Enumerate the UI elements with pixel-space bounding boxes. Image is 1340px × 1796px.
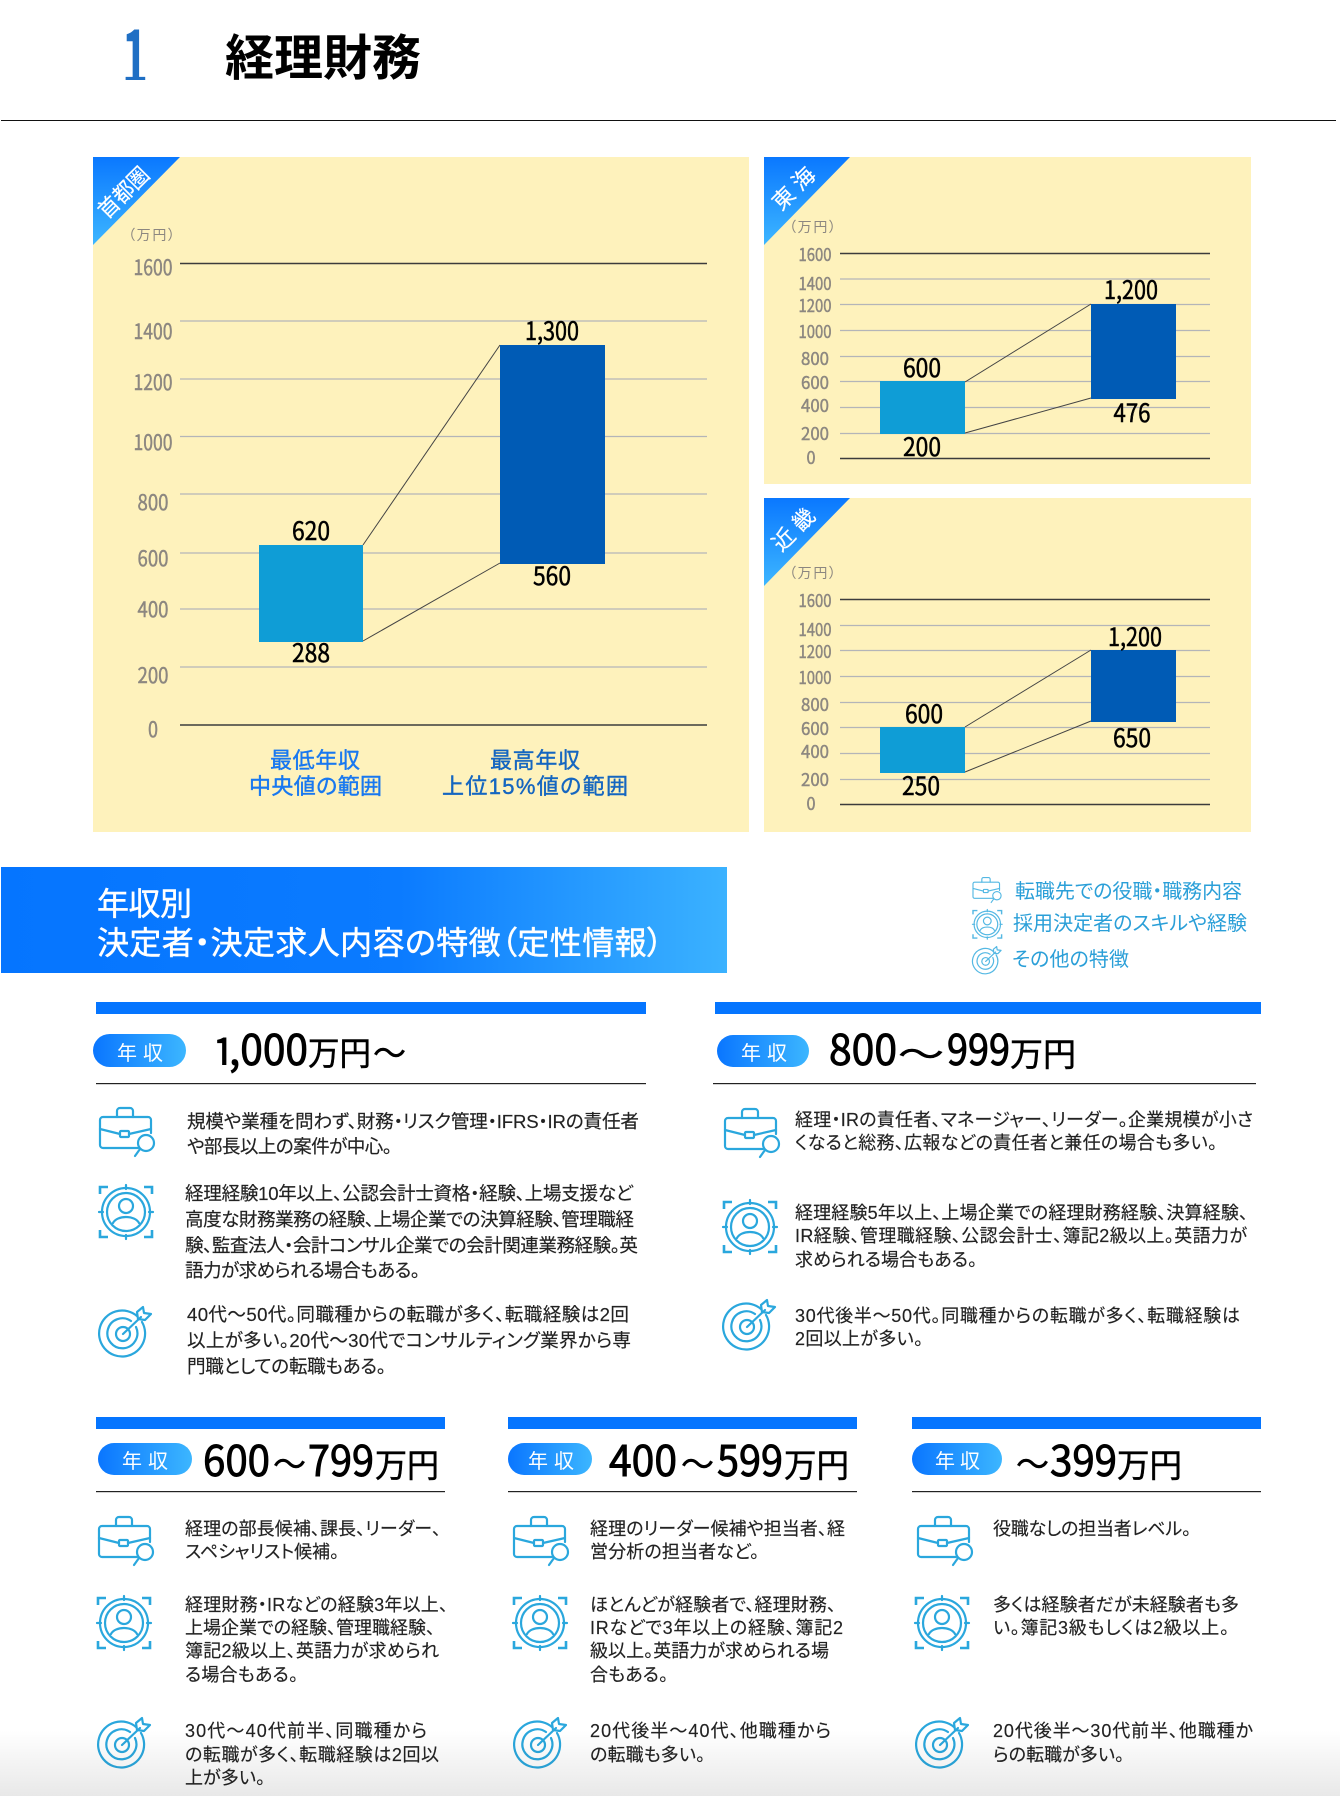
text: skills: 求められる場合もある。: [795, 1250, 977, 1270]
bar: lowest salary range: [880, 727, 965, 773]
salary heading: 599: [717, 1428, 783, 1489]
salary heading: ～: [898, 1036, 944, 1073]
bar values: 1,300: [525, 312, 579, 348]
unit label: （万円）: [789, 219, 836, 235]
text: position: 営分析の担当者など。: [590, 1542, 759, 1562]
bar values: [292, 312, 579, 670]
legend: 転職先での役職・職務内容: [1015, 880, 1242, 903]
y axis labels: 1600: [798, 587, 832, 613]
icon: target: [98, 1718, 150, 1768]
y axis labels: 200: [801, 766, 829, 792]
text: other: [590, 1721, 831, 1765]
salary heading: ～: [373, 1035, 406, 1072]
y axis labels: 800: [801, 691, 829, 717]
text: skills: 簿記2級以上、英語力が求められ: [185, 1641, 439, 1661]
salary heading: 399: [1050, 1428, 1117, 1489]
category label: 最低年収: 中央値の範囲: [249, 774, 382, 799]
text: skills: 経理経験5年以上、上場企業での経理財務経験、決算経験、: [795, 1203, 1248, 1223]
text: other: の転職が多く、転職経験は2回以: [185, 1745, 439, 1765]
text: skills: 経理財務・IRなどの経験3年以上、: [185, 1595, 448, 1615]
section title: 経理財務: [225, 32, 421, 86]
y axis labels: 1200: [134, 367, 172, 397]
icon: person: [915, 1596, 969, 1650]
salary heading: 400: [609, 1428, 677, 1489]
pill: 年収: [93, 1034, 186, 1067]
text: other: 20代後半～40代、他職種から: [590, 1721, 831, 1741]
salary heading: 万円: [308, 1035, 371, 1072]
salary heading: 1: [213, 1021, 234, 1082]
y axis labels: 1000: [798, 318, 832, 344]
pill: 年収: 年収: [741, 1042, 787, 1065]
icon: person: [513, 1596, 567, 1650]
salary heading: ～: [1016, 1446, 1049, 1483]
banner: 年収別 heading: 決定者・決定求人内容の特徴（定性情報）: [97, 925, 663, 961]
y axis labels: 1400: [798, 616, 832, 642]
icon: person: [97, 1596, 151, 1650]
text: other: [795, 1306, 1240, 1349]
region tag: 近畿: [764, 498, 850, 586]
salary heading: 999: [947, 1017, 1010, 1078]
bar values: 250: [902, 767, 940, 803]
category label: 最低年収: [249, 748, 382, 799]
y axis labels: [798, 241, 832, 470]
panel: 東海 chart: [764, 157, 1251, 484]
y axis labels: [134, 252, 172, 744]
heading: section number and title: [126, 30, 420, 80]
text: position: 経理のリーダー候補や担当者、経: [590, 1519, 845, 1539]
pill: 年収: [508, 1443, 592, 1475]
pill: 年収: [717, 1035, 809, 1067]
text: position: 役職なしの担当者レベル。: [993, 1519, 1191, 1539]
unit label: （万円）: [789, 565, 836, 581]
legend: その他の特徴: [1012, 948, 1129, 971]
bar values: 620: [292, 512, 330, 548]
icon: target: [99, 1307, 151, 1357]
text: other: 20代後半～30代前半、他職種か: [993, 1721, 1253, 1741]
connector lines: [965, 650, 1091, 772]
text: position: [590, 1519, 845, 1562]
bar: lowest salary range: [259, 545, 363, 642]
y axis labels: 0: [806, 444, 816, 470]
panel: 年収 400～599万円: [508, 1417, 857, 1768]
salary heading: 万円: [1010, 1036, 1076, 1073]
pill: 年収: [912, 1443, 1002, 1475]
text: position: 経理・IRの責任者、マネージャー、リーダー。企業規模が小さ: [795, 1110, 1253, 1130]
y axis labels: 0: [148, 714, 158, 744]
y axis labels: 1000: [134, 427, 172, 457]
text: skills: 合もある。: [590, 1665, 668, 1685]
salary heading: [217, 1033, 405, 1074]
bar: highest salary range: [1091, 304, 1176, 399]
text: position: 経理の部長候補、課長、リーダー、: [185, 1519, 441, 1539]
text: other: 上が多い。: [185, 1768, 265, 1788]
unit label: （万円）: [128, 227, 175, 243]
text: skills: [590, 1595, 843, 1685]
icon: briefcase: [99, 1517, 153, 1565]
banner: 年収別 heading: 年収別: [97, 886, 192, 922]
text: skills: [993, 1595, 1239, 1638]
panel: 年収 1,000万円～: [93, 1002, 646, 1377]
y axis labels: 1200: [798, 292, 832, 318]
pill: 年収: 年収: [117, 1042, 163, 1065]
y axis labels: 600: [801, 715, 829, 741]
salary heading: 800: [829, 1017, 897, 1078]
panel: 年収 800～999万円: [713, 1002, 1261, 1350]
salary heading: [203, 1428, 439, 1489]
icon: briefcase: [973, 878, 1001, 902]
icon: target: [514, 1718, 566, 1768]
salary heading: ～: [681, 1446, 714, 1483]
text: skills: [795, 1203, 1248, 1270]
bar values: 1,200: [1104, 271, 1158, 307]
y axis labels: 1400: [134, 316, 172, 346]
text: skills: 経理経験10年以上、公認会計士資格・経験、上場支援など: [185, 1183, 635, 1204]
bar values: 560: [533, 557, 571, 593]
category label: 最高年収: 上位15%値の範囲: [442, 774, 628, 799]
salary heading: [829, 1017, 1076, 1078]
pill: 年収: 年収: [122, 1450, 168, 1473]
icon: briefcase: [514, 1517, 568, 1565]
legend: [972, 878, 1247, 974]
salary heading: [1016, 1428, 1182, 1489]
icon: briefcase: [918, 1517, 972, 1565]
text: other: 30代～40代前半、同職種から: [185, 1721, 427, 1741]
legend: 採用決定者のスキルや経験: [1013, 912, 1247, 935]
connector lines: [363, 345, 500, 641]
text: other: [187, 1304, 631, 1377]
panel: 首都圏 chart: [93, 157, 749, 832]
panel: 年収 ～399万円: [912, 1417, 1261, 1768]
y axis labels: 800: [801, 345, 829, 371]
bar values: 476: [1114, 394, 1150, 430]
y axis labels: 200: [801, 420, 829, 446]
text: position: [185, 1519, 441, 1562]
salary heading: 799: [308, 1428, 374, 1489]
connector lines: [965, 304, 1091, 433]
y axis labels: 400: [138, 594, 168, 624]
salary heading: 600: [203, 1428, 270, 1489]
text: skills: る場合もある。: [185, 1665, 298, 1685]
bar values: 200: [903, 428, 941, 464]
panel: 近畿 chart: [764, 498, 1251, 832]
chart gridlines: [840, 600, 1210, 804]
text: other: 2回以上が多い。: [795, 1329, 923, 1349]
category label: 最低年収: 最低年収: [270, 748, 360, 773]
text: position: [795, 1110, 1253, 1153]
y axis labels: [798, 587, 832, 816]
pill: 年収: 年収: [528, 1450, 574, 1473]
chart gridlines: [840, 254, 1210, 458]
y axis labels: 800: [138, 487, 168, 517]
text: other: 30代後半～50代。同職種からの転職が多く、転職経験は: [795, 1306, 1240, 1326]
y axis labels: 1600: [134, 252, 172, 282]
icon: briefcase: [100, 1108, 154, 1156]
bar values: 600: [903, 349, 941, 385]
text: skills: い。簿記3級もしくは2級以上。: [993, 1618, 1229, 1638]
chart gridlines: [180, 264, 707, 725]
bar values: 600: [905, 695, 943, 731]
bar values: 288: [292, 634, 330, 670]
text: position: スペシャリスト候補。: [185, 1542, 339, 1562]
region tag: 首都圏: 首都圏: [93, 162, 154, 223]
text: position: や部長以上の案件が中心。: [187, 1136, 392, 1157]
category label: 最高年収: [442, 748, 628, 799]
salary heading: ～: [273, 1446, 306, 1483]
y axis labels: 1000: [798, 664, 832, 690]
text: skills: ほとんどが経験者で、経理財務、: [590, 1595, 836, 1615]
panel: 年収 600～799万円: [96, 1417, 448, 1788]
text: position: [187, 1111, 639, 1157]
text: skills: 験、監査法人・会計コンサル企業での会計関連業務経験。英: [185, 1235, 638, 1256]
y axis labels: 600: [801, 369, 829, 395]
icon: target: [972, 947, 1001, 974]
y axis labels: 600: [138, 543, 168, 573]
y axis labels: 1400: [798, 270, 832, 296]
icon: person: [99, 1185, 153, 1239]
pill: 年収: [98, 1443, 192, 1475]
salary heading: ,000: [229, 1017, 308, 1078]
text: skills: 多くは経験者だが未経験者も多: [993, 1595, 1239, 1615]
salary heading: 万円: [375, 1447, 439, 1484]
banner: 年収別 heading: [1, 867, 727, 973]
salary heading: [609, 1428, 849, 1489]
bar values: [903, 271, 1158, 464]
text: position: 規模や業種を問わず、財務・リスク管理・IFRS・IRの責任者: [187, 1111, 639, 1132]
y axis labels: 1600: [798, 241, 832, 267]
text: other: 40代～50代。同職種からの転職が多く、転職経験は2回: [187, 1304, 629, 1325]
bar: lowest salary range: [880, 381, 965, 434]
y axis labels: 200: [138, 660, 168, 690]
region tag: 東海: 東海: [767, 162, 820, 215]
y axis labels: 1200: [798, 638, 832, 664]
icon: person: [723, 1200, 777, 1254]
bar: highest salary range: [1091, 650, 1176, 722]
text: other: 門職としての転職もある。: [187, 1356, 386, 1377]
icon: target: [916, 1718, 968, 1768]
y axis labels: 0: [806, 790, 816, 816]
icon: person: [972, 909, 1002, 939]
text: skills: [185, 1595, 448, 1685]
text: skills: IRなどで3年以上の経験、簿記2: [590, 1618, 843, 1638]
text: other: 以上が多い。20代～30代でコンサルティング業界から専: [187, 1330, 631, 1351]
salary heading: 万円: [784, 1447, 849, 1484]
y axis labels: 400: [801, 738, 829, 764]
region tag: 首都圏: [93, 157, 180, 245]
text: other: の転職も多い。: [590, 1745, 705, 1765]
text: other: [185, 1721, 439, 1788]
text: other: [993, 1721, 1253, 1765]
text: skills: [185, 1183, 638, 1281]
icon: briefcase: [725, 1109, 779, 1157]
section number: 1: [122, 0, 148, 108]
text: position: くなると総務、広報などの責任者と兼任の場合も多い。: [795, 1133, 1217, 1153]
salary heading: 万円: [1117, 1447, 1182, 1484]
text: skills: 高度な財務業務の経験、上場企業での決算経験、管理職経: [185, 1209, 634, 1230]
y axis labels: 400: [801, 392, 829, 418]
pill: 年収: 年収: [935, 1450, 980, 1473]
icon: target: [723, 1300, 775, 1350]
bar values: 1,200: [1108, 618, 1162, 654]
bar: highest salary range: [500, 345, 605, 564]
text: skills: 語力が求められる場合もある。: [185, 1260, 420, 1281]
region tag: 東海: [764, 157, 850, 245]
text: skills: IR経験、管理職経験、公認会計士、簿記2級以上。英語力が: [795, 1226, 1247, 1246]
category label: 最高年収: 最高年収: [490, 748, 580, 773]
region tag: 近畿: 近畿: [767, 503, 820, 556]
text: skills: 級以上。英語力が求められる場: [590, 1641, 829, 1661]
text: other: らの転職が多い。: [993, 1745, 1124, 1765]
text: skills: 上場企業での経験、管理職経験、: [185, 1618, 435, 1638]
bar values: [902, 618, 1162, 803]
bar values: 650: [1113, 719, 1151, 755]
